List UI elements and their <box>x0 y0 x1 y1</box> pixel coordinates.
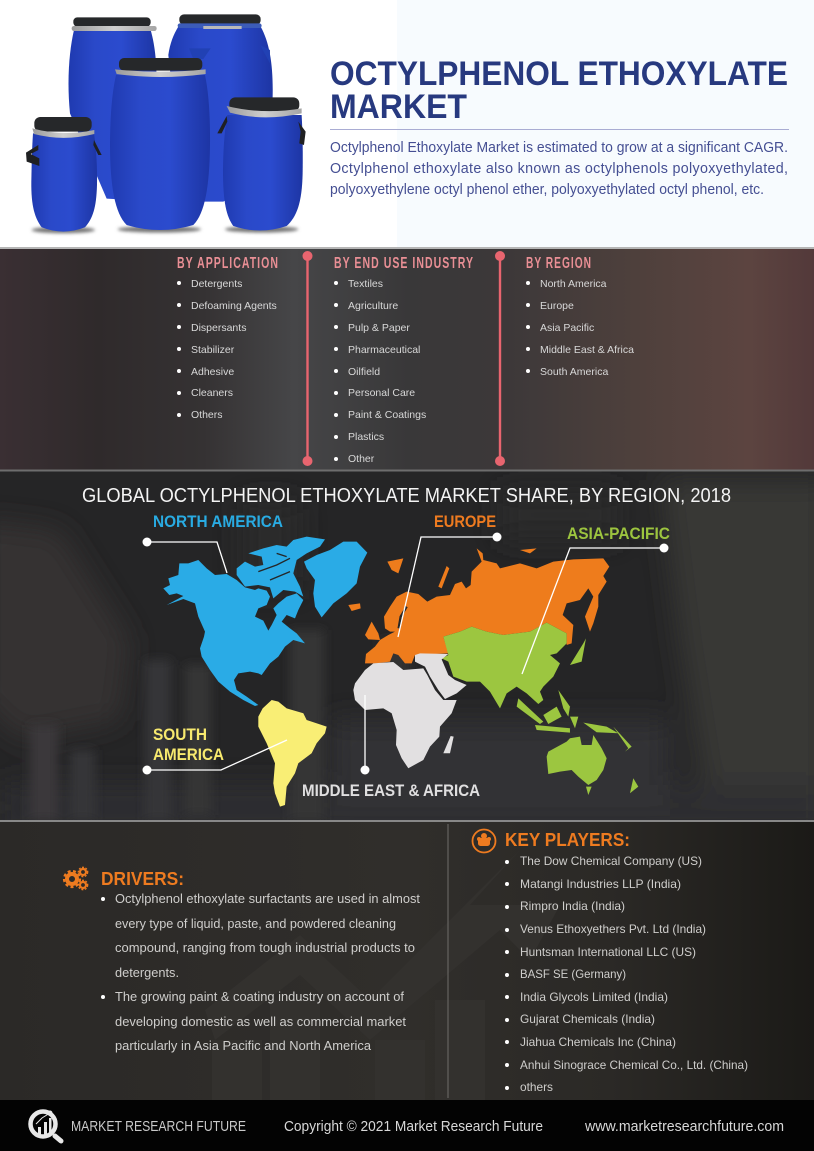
column: by region: North America <box>540 278 607 290</box>
drivers text <box>115 891 420 1053</box>
player list: Huntsman International LLC (US) <box>520 945 696 959</box>
icon: gears <box>64 867 88 890</box>
column: by end use industry: Agriculture <box>348 300 398 312</box>
column: by region <box>526 255 634 378</box>
player list: Gujarat Chemicals (India) <box>520 1012 655 1026</box>
label: North America: NORTH AMERICA <box>153 513 283 531</box>
column: by region: South America <box>540 366 608 378</box>
column: by end use industry <box>334 255 474 465</box>
column: by end use industry: Other <box>348 453 375 465</box>
world map <box>154 537 638 807</box>
column: by region: BY REGION <box>526 255 592 272</box>
column: by application: Detergents <box>191 278 242 290</box>
label: Asia-Pacific: ASIA-PACIFIC <box>567 525 670 543</box>
footer <box>0 1100 814 1151</box>
column: by application: Dispersants <box>191 322 246 334</box>
intro text: polyoxyethylene octyl phenol ether, polyoxyethylated octyl phenol, etc. <box>330 182 764 198</box>
column: by end use industry: BY END USE INDUSTRY <box>334 255 474 272</box>
heading: map title: GLOBAL OCTYLPHENOL ETHOXYLATE MARKET SHARE, BY REGION, 2018 <box>82 484 731 507</box>
label: South America <box>153 726 224 764</box>
divider 1 <box>302 251 312 466</box>
column: by end use industry: Plastics <box>348 431 384 443</box>
heading: key players: KEY PLAYERS: <box>505 830 630 850</box>
column: by end use industry: Personal Care <box>348 387 415 399</box>
divider 2 <box>495 251 505 466</box>
player list: Venus Ethoxyethers Pvt. Ltd (India) <box>520 922 706 936</box>
player list: Matangi Industries LLP (India) <box>520 877 681 891</box>
label: Middle East and Africa: MIDDLE EAST & AFRICA <box>302 782 480 800</box>
column: by application: Defoaming Agents <box>191 300 277 312</box>
panel: world map section background <box>0 470 814 830</box>
column: by application: Cleaners <box>191 387 233 399</box>
player list: The Dow Chemical Company (US) <box>520 854 702 868</box>
drivers text: detergents. <box>115 965 179 980</box>
drivers text: The growing paint & coating industry on account of <box>115 989 404 1004</box>
column: by end use industry: Pulp & Paper <box>348 322 410 334</box>
region: North America <box>154 537 367 706</box>
column: by region: Middle East & Africa <box>540 344 634 356</box>
title <box>330 55 788 126</box>
icon: logo magnifier <box>30 1110 61 1141</box>
region: Europe and Russia <box>348 548 609 663</box>
panel: drivers and key players background <box>0 820 814 1100</box>
copyright: Copyright © 2021 Market Research Future <box>284 1118 543 1135</box>
player list: India Glycols Limited (India) <box>520 990 668 1004</box>
region: South America <box>258 700 327 807</box>
icon: people in circle <box>472 830 496 852</box>
heading: drivers: DRIVERS: <box>101 869 184 889</box>
label: Europe: EUROPE <box>434 513 496 531</box>
drivers text: developing domestic as well as commercial market <box>115 1014 406 1029</box>
region: Middle East and Africa <box>353 653 467 768</box>
player list: others <box>520 1080 553 1094</box>
panel: drivers <box>64 867 420 1053</box>
leader dots <box>142 532 668 774</box>
column: by application: Others <box>191 409 223 421</box>
column: by application: Adhesive <box>191 366 234 378</box>
region: Asia-Pacific <box>442 623 638 795</box>
column: by end use industry: Oilfield <box>348 366 380 378</box>
drivers text: Octylphenol ethoxylate surfactants are used in almost <box>115 891 420 906</box>
column: by end use industry: Pharmaceutical <box>348 344 420 356</box>
website: www.marketresearchfuture.com <box>584 1118 784 1135</box>
player list <box>520 854 748 1094</box>
title: MARKET <box>330 88 467 126</box>
leader lines <box>147 537 664 770</box>
panel: key players <box>472 830 748 1094</box>
drivers text: compound, ranging from tough industrial products to <box>115 940 415 955</box>
intro text <box>330 140 788 198</box>
header background <box>0 0 814 248</box>
bullets <box>101 897 105 999</box>
player list: Jiahua Chemicals Inc (China) <box>520 1035 676 1049</box>
column: by end use industry: Textiles <box>348 278 383 290</box>
player list: Rimpro India (India) <box>520 899 625 913</box>
brand name: MARKET RESEARCH FUTURE <box>71 1118 246 1135</box>
column: by region: Europe <box>540 300 574 312</box>
column: by application <box>177 255 279 421</box>
intro text: Octylphenol Ethoxylate Market is estimated to grow at a significant CAGR. <box>330 140 788 156</box>
column: by application: Stabilizer <box>191 344 235 356</box>
image: blue plastic barrels <box>26 14 306 233</box>
drivers text: particularly in Asia Pacific and North America <box>115 1038 372 1053</box>
label: South America: AMERICA <box>153 746 224 764</box>
label: South America: SOUTH <box>153 726 207 744</box>
drivers text: every type of liquid, paste, and powdered cleaning <box>115 916 396 931</box>
column: by region: Asia Pacific <box>540 322 594 334</box>
player list: BASF SE (Germany) <box>520 967 626 981</box>
intro text: Octylphenol ethoxylate also known as octylphenols polyoxyethylated, <box>330 161 788 177</box>
panel: market segments <box>0 247 814 471</box>
player list: Anhui Sinograce Chemical Co., Ltd. (China) <box>520 1058 748 1072</box>
column: by end use industry: Paint & Coatings <box>348 409 426 421</box>
column: by application: BY APPLICATION <box>177 255 279 272</box>
title: OCTYLPHENOL ETHOXYLATE <box>330 55 788 93</box>
bullets <box>505 860 509 1090</box>
